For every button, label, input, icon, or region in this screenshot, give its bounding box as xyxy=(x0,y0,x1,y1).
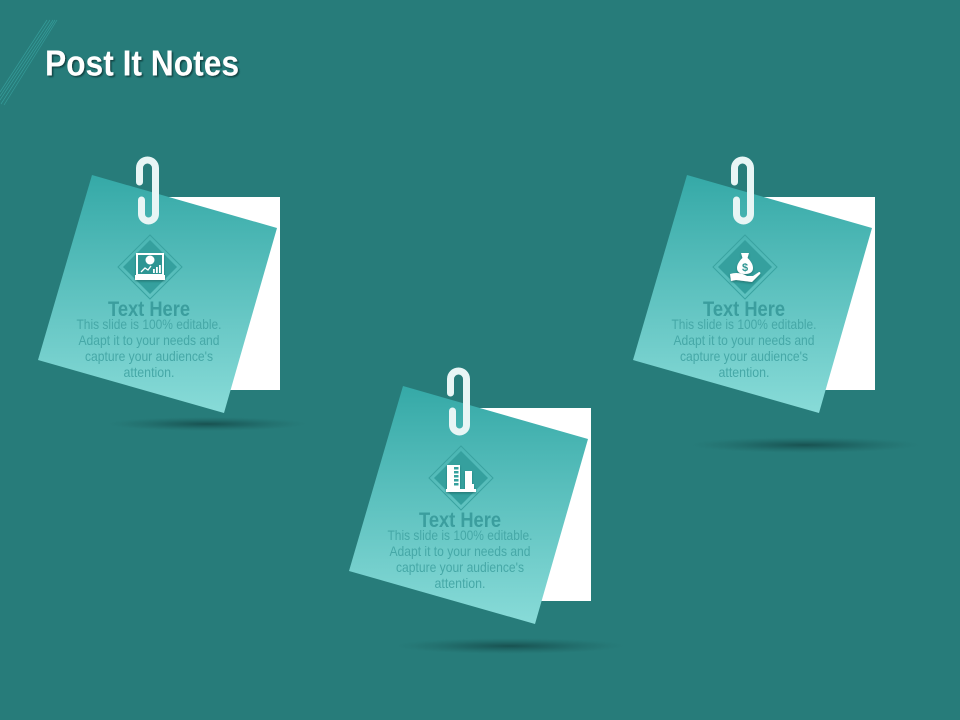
body text: This slide is 100% editable. xyxy=(76,316,222,332)
icon: laptop chart in diamond xyxy=(118,235,182,299)
body text: This slide is 100% editable. xyxy=(388,527,532,543)
body text xyxy=(388,527,532,591)
body text: attention. xyxy=(124,364,174,380)
body text: attention. xyxy=(434,575,486,591)
body text: Adapt it to your needs and xyxy=(674,332,814,348)
rotated sticky note xyxy=(633,175,872,413)
body text: Adapt it to your needs and xyxy=(390,543,530,559)
body text: attention. xyxy=(718,364,770,380)
title: Post It Notes xyxy=(45,42,239,84)
body text: capture your audience's xyxy=(85,348,213,364)
body text xyxy=(672,316,816,380)
rotated sticky note xyxy=(38,175,277,413)
white backing sheet xyxy=(745,197,875,390)
heading: Text Here xyxy=(703,298,785,321)
floor shadow xyxy=(101,416,313,432)
decorative diagonal lines xyxy=(0,20,57,105)
body text: Adapt it to your needs and xyxy=(78,332,220,348)
body text: This slide is 100% editable. xyxy=(672,316,816,332)
paper clip xyxy=(734,160,750,221)
icon: books and ladder in diamond xyxy=(429,446,493,510)
white backing sheet xyxy=(461,408,591,601)
icon: money bag over hand in diamond xyxy=(713,235,777,299)
paper clip xyxy=(140,160,156,221)
body text: capture your audience's xyxy=(680,348,808,364)
white backing sheet xyxy=(150,197,280,390)
floor shadow xyxy=(683,436,927,454)
panel: note 2 finance xyxy=(633,160,927,454)
body text: capture your audience's xyxy=(396,559,524,575)
heading: Text Here xyxy=(108,298,190,321)
icon: money bag over hand in diamond: $ xyxy=(742,262,748,274)
paper clip xyxy=(450,371,466,432)
rotated sticky note xyxy=(349,386,588,624)
heading: Text Here xyxy=(419,509,501,532)
panel: note 3 library xyxy=(349,371,632,654)
panel: note 1 analytics xyxy=(38,160,313,432)
body text xyxy=(76,316,222,380)
floor shadow xyxy=(388,638,632,654)
